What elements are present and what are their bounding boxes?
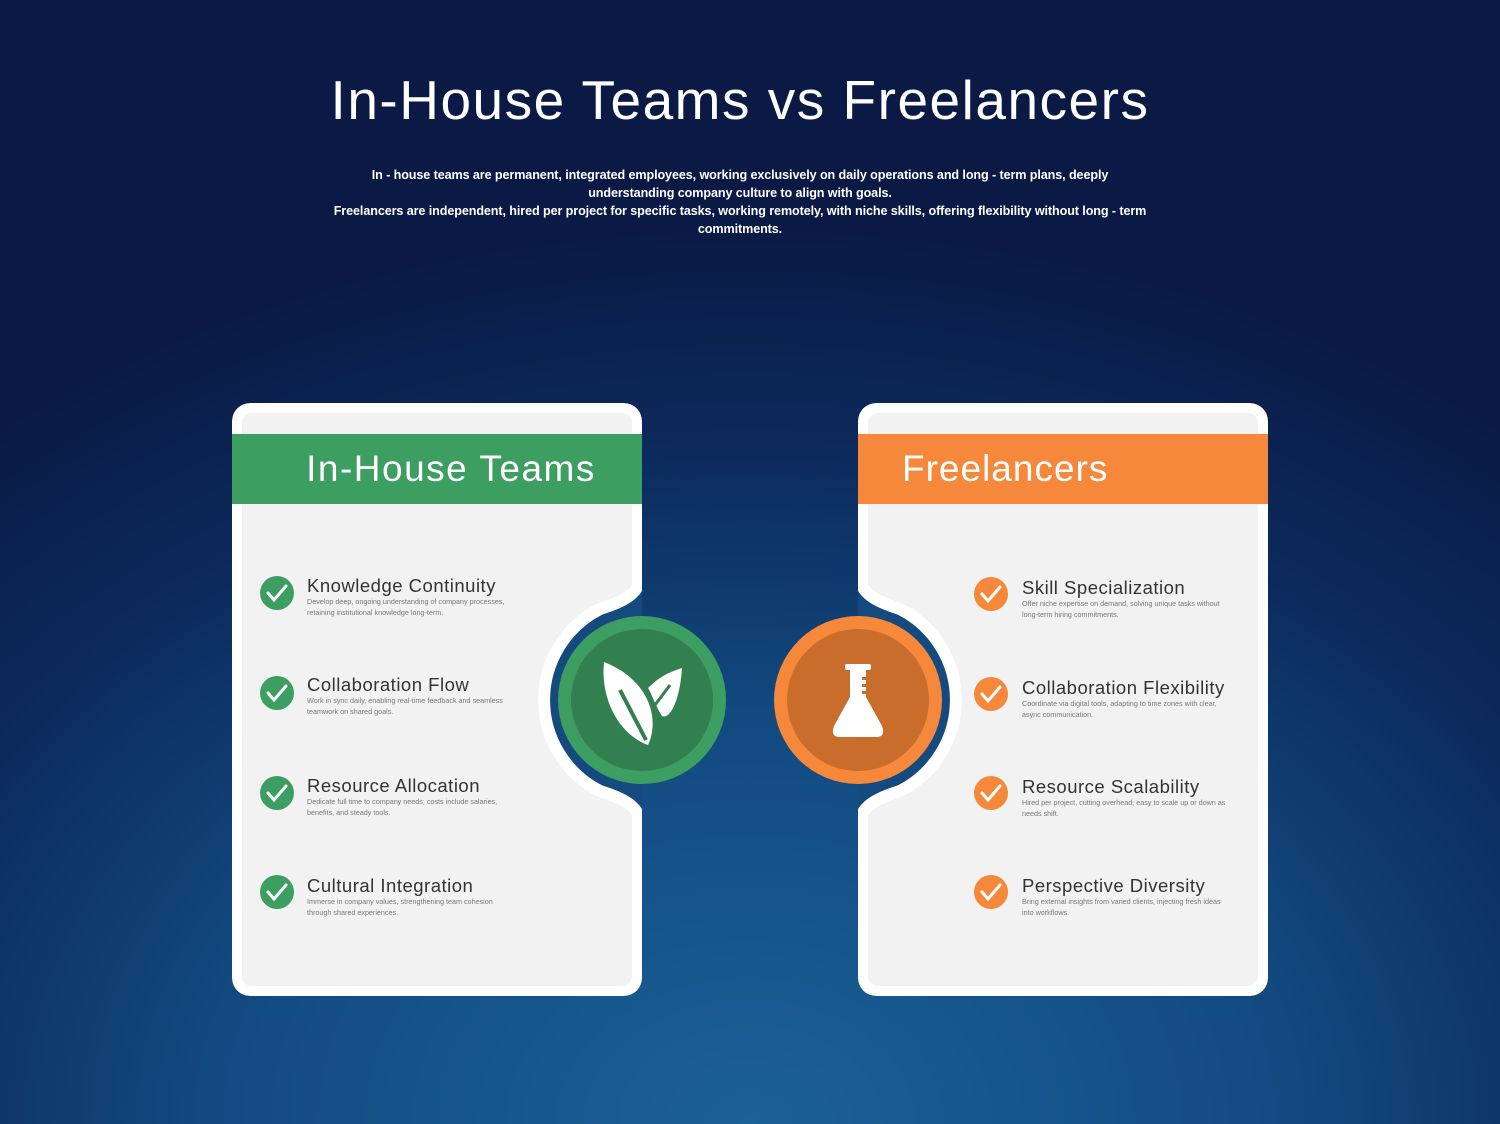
item: resource scalability xyxy=(1022,776,1226,818)
header: in-house teams: In-House Teams xyxy=(306,448,596,489)
item: knowledge continuity: Knowledge Continuity xyxy=(307,575,496,596)
item: cultural integration: Cultural Integration xyxy=(307,875,473,896)
subtitle text: Freelancers are independent, hired per project for specific tasks, working remotely, with niche skills, offering flexibility without long - term xyxy=(334,204,1146,218)
icon: flask xyxy=(774,616,942,784)
item: collaboration flow xyxy=(307,674,503,716)
item: skill specialization xyxy=(1022,577,1220,619)
title: In-House Teams vs Freelancers xyxy=(331,69,1149,131)
item: collaboration flow: Work in sync daily, enabling real-time feedback and seamless teamwork on shared goals. xyxy=(307,696,503,716)
item: skill specialization: Skill Specialization xyxy=(1022,577,1185,598)
subtitle text: In - house teams are permanent, integrated employees, working exclusively on daily operations and long - term plans, deeply xyxy=(372,168,1108,182)
item: resource scalability: Resource Scalability xyxy=(1022,776,1200,797)
item: knowledge continuity xyxy=(307,575,504,617)
subtitle text: understanding company culture to align with goals. xyxy=(588,186,892,200)
subtitle text: commitments. xyxy=(698,222,782,236)
item: cultural integration xyxy=(307,875,493,917)
item: collaboration flexibility xyxy=(1022,677,1225,719)
item: resource allocation xyxy=(307,775,497,817)
item: perspective diversity: Perspective Diversity xyxy=(1022,875,1205,896)
item: resource scalability: Hired per project, cutting overhead; easy to scale up or down as needs shift. xyxy=(1022,798,1225,818)
panel: freelancers xyxy=(840,403,1268,996)
item: knowledge continuity: Develop deep, ongoing understanding of company processes, retaining institutional knowledge long-term. xyxy=(307,597,504,617)
item: skill specialization: Offer niche expertise on demand, solving unique tasks without long-term hiring commitments. xyxy=(1022,599,1220,619)
panel: in-house teams xyxy=(232,403,660,996)
item: perspective diversity xyxy=(1022,875,1221,917)
subtitle text xyxy=(334,168,1146,236)
item: resource allocation: Resource Allocation xyxy=(307,775,480,796)
icon: leaf xyxy=(558,616,726,784)
cards and center icons xyxy=(232,403,1268,996)
header: freelancers: Freelancers xyxy=(902,448,1108,489)
item: collaboration flow: Collaboration Flow xyxy=(307,674,469,695)
item: collaboration flexibility: Collaboration Flexibility xyxy=(1022,677,1225,698)
item: collaboration flexibility: Coordinate via digital tools, adapting to time zones with clear, async communication. xyxy=(1022,699,1217,719)
item: resource allocation: Dedicate full time to company needs; costs include salaries, benefits, and steady tools. xyxy=(307,797,497,817)
item: perspective diversity: Bring external insights from varied clients, injecting fresh ideas into workflows. xyxy=(1022,897,1221,917)
item: cultural integration: Immerse in company values, strengthening team cohesion through shared experiences. xyxy=(307,897,493,917)
